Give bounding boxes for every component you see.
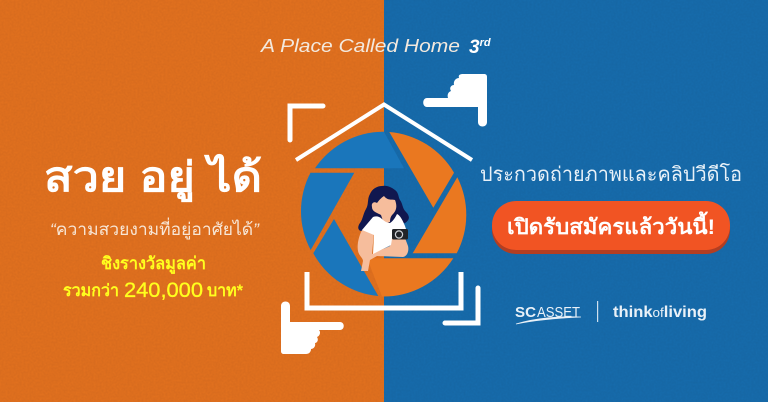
- logo: SC Asset: SC: [515, 305, 537, 321]
- text block: prize line 1: ชิงรางวัลมูลค่า: [101, 254, 206, 275]
- hair: [358, 186, 409, 231]
- title: [260, 35, 491, 58]
- title: A Place Called Home: [260, 35, 460, 56]
- divider: [597, 301, 598, 322]
- text block: subtitle quote: “ความสวยงามที่อยู่อาศัยได้ ”: [50, 217, 260, 240]
- logo: SC Asset: ASSET: [537, 305, 580, 321]
- icon: woman holding camera: [358, 186, 409, 271]
- icon: pointing hand top right: [423, 74, 487, 126]
- title: 3: [469, 37, 480, 58]
- logo: think of living: thinkofliving: [613, 304, 707, 321]
- aperture blade: lower left: [313, 219, 378, 296]
- title: rd: [480, 37, 491, 49]
- panel: orange background: [0, 0, 384, 402]
- aperture blade: left: [301, 173, 354, 250]
- corner frame: bottom right: [445, 288, 478, 323]
- text block: prize line 2: บาท*: [207, 282, 244, 300]
- shirt: [362, 214, 407, 254]
- logo: SC Asset: [515, 305, 581, 324]
- icon: house roof frame: [296, 104, 472, 160]
- icon: pointing hand bottom left: [281, 302, 344, 354]
- aperture blade: right: [413, 177, 466, 253]
- button: apply now: [492, 201, 730, 254]
- button label: เปิดรับสมัครแล้ววันนี้!: [507, 211, 715, 239]
- aperture blade: upper right: [389, 132, 454, 208]
- face and neck: [372, 196, 396, 224]
- aperture blade: top: [315, 132, 404, 168]
- arms: [358, 230, 408, 271]
- bracket frame: bottom: [307, 272, 461, 308]
- aperture blade: bottom: [367, 258, 453, 297]
- camera: [392, 229, 408, 240]
- panel: blue background: [384, 0, 768, 402]
- corner frame: top left: [290, 106, 323, 140]
- text block: contest description: ประกวดถ่ายภาพและคลิปวีดีโอ: [480, 163, 742, 186]
- heading: main Thai title: สวย อยู่ ได้: [44, 153, 262, 203]
- text block: prize line 2: 240,000: [124, 279, 203, 302]
- text block: prize line 2: รวมกว่า: [63, 282, 119, 300]
- text block: prize line 2: [63, 279, 244, 302]
- icon: camera aperture: [301, 132, 466, 297]
